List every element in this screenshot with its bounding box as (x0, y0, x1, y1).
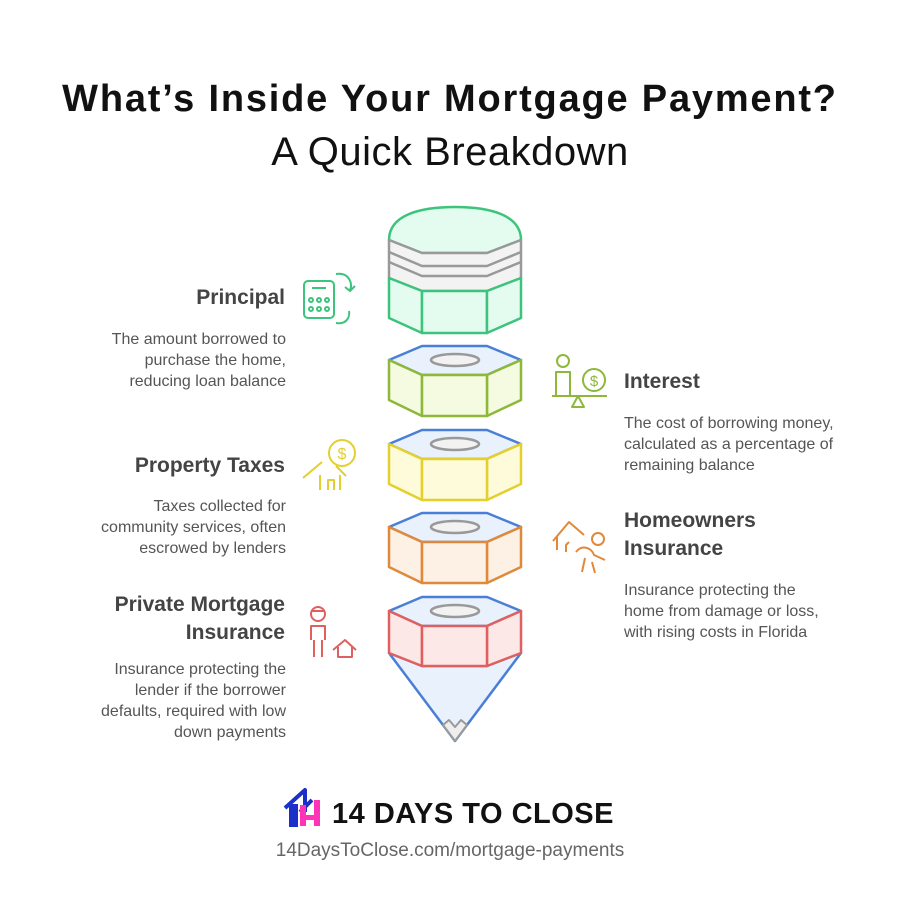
panel: property taxes (101, 454, 286, 557)
icon: house with dollar (303, 440, 355, 490)
text: Principal (196, 286, 285, 309)
panel: homeowners insurance (624, 509, 819, 641)
text: Private Mortgage Insurance (115, 593, 285, 644)
nut: property taxes (389, 430, 521, 500)
icon: calculator (304, 274, 355, 323)
nut: PMI (389, 597, 521, 666)
title: What’s Inside Your Mortgage Payment? (62, 78, 838, 120)
text: Insurance protecting the lender if the borrower defaults, required with low down payments (101, 661, 286, 741)
text: The cost of borrowing money, calculated as a percentage of remaining balance (624, 415, 834, 474)
text: Property Taxes (135, 454, 285, 477)
icon: person and scale (552, 355, 607, 407)
nut: interest (389, 346, 521, 416)
icon: house and person falling (553, 522, 605, 573)
logo text: 14 DAYS TO CLOSE (332, 798, 614, 830)
panel: PMI (101, 593, 286, 741)
icon: house with dollar: $ (338, 446, 347, 463)
pencil cone (389, 653, 521, 741)
subtitle: A Quick Breakdown (271, 130, 629, 174)
text: Taxes collected for community services, often escrowed by lenders (101, 498, 286, 557)
icon: person and scale: $ (590, 373, 599, 390)
logo icon (285, 790, 320, 827)
panel: principal (112, 286, 286, 390)
nut: homeowners insurance (389, 513, 521, 583)
panel: interest (624, 370, 834, 474)
icon: person with house (311, 607, 356, 657)
text: Insurance protecting the home from damage or loss, with rising costs in Florida (624, 582, 819, 641)
url: 14DaysToClose.com/mortgage-payments (276, 840, 624, 861)
text: Interest (624, 370, 700, 393)
text: Homeowners Insurance (624, 509, 756, 560)
text: The amount borrowed to purchase the home, reducing loan balance (112, 331, 286, 390)
eraser cap (389, 207, 521, 333)
